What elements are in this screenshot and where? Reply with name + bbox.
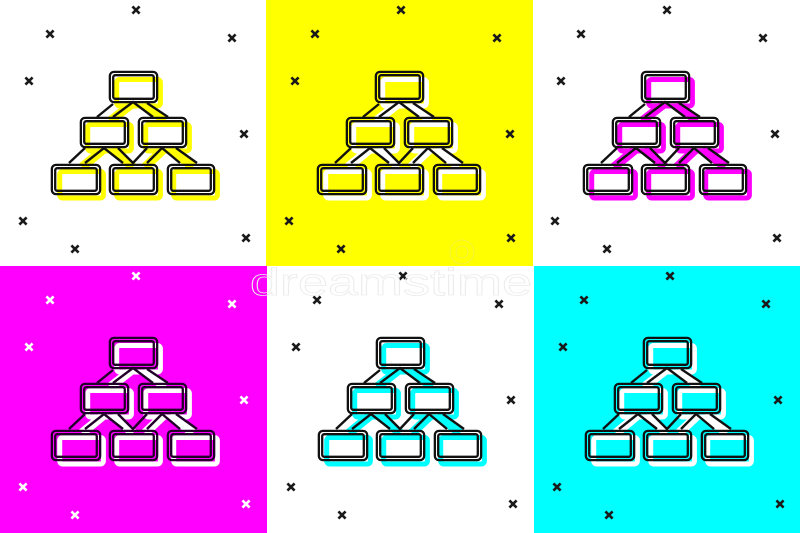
icon: hierarchy white on magenta bbox=[52, 338, 217, 464]
cross marks bbox=[287, 272, 517, 519]
panel: white with yellow icon bbox=[0, 0, 266, 266]
watermark bbox=[250, 240, 532, 304]
panel: white with cyan icon bbox=[267, 266, 534, 533]
icon: hierarchy yellow on white bbox=[52, 72, 217, 198]
cross marks bbox=[551, 6, 781, 253]
cross marks bbox=[285, 6, 515, 253]
panel: cyan with white icon bbox=[534, 266, 800, 533]
watermark: dreamstime bbox=[250, 262, 532, 304]
icon: hierarchy cyan on white bbox=[319, 338, 484, 464]
icon: hierarchy white on yellow bbox=[318, 72, 483, 198]
panel: white with magenta icon bbox=[533, 0, 800, 266]
cross marks bbox=[553, 272, 784, 519]
panel: yellow with white icon bbox=[266, 0, 533, 266]
panel: magenta with white icon bbox=[0, 266, 267, 533]
cross marks bbox=[19, 272, 250, 519]
cross marks bbox=[19, 6, 250, 253]
icon: hierarchy magenta on white bbox=[584, 72, 749, 198]
icon: hierarchy white on cyan bbox=[586, 338, 751, 464]
